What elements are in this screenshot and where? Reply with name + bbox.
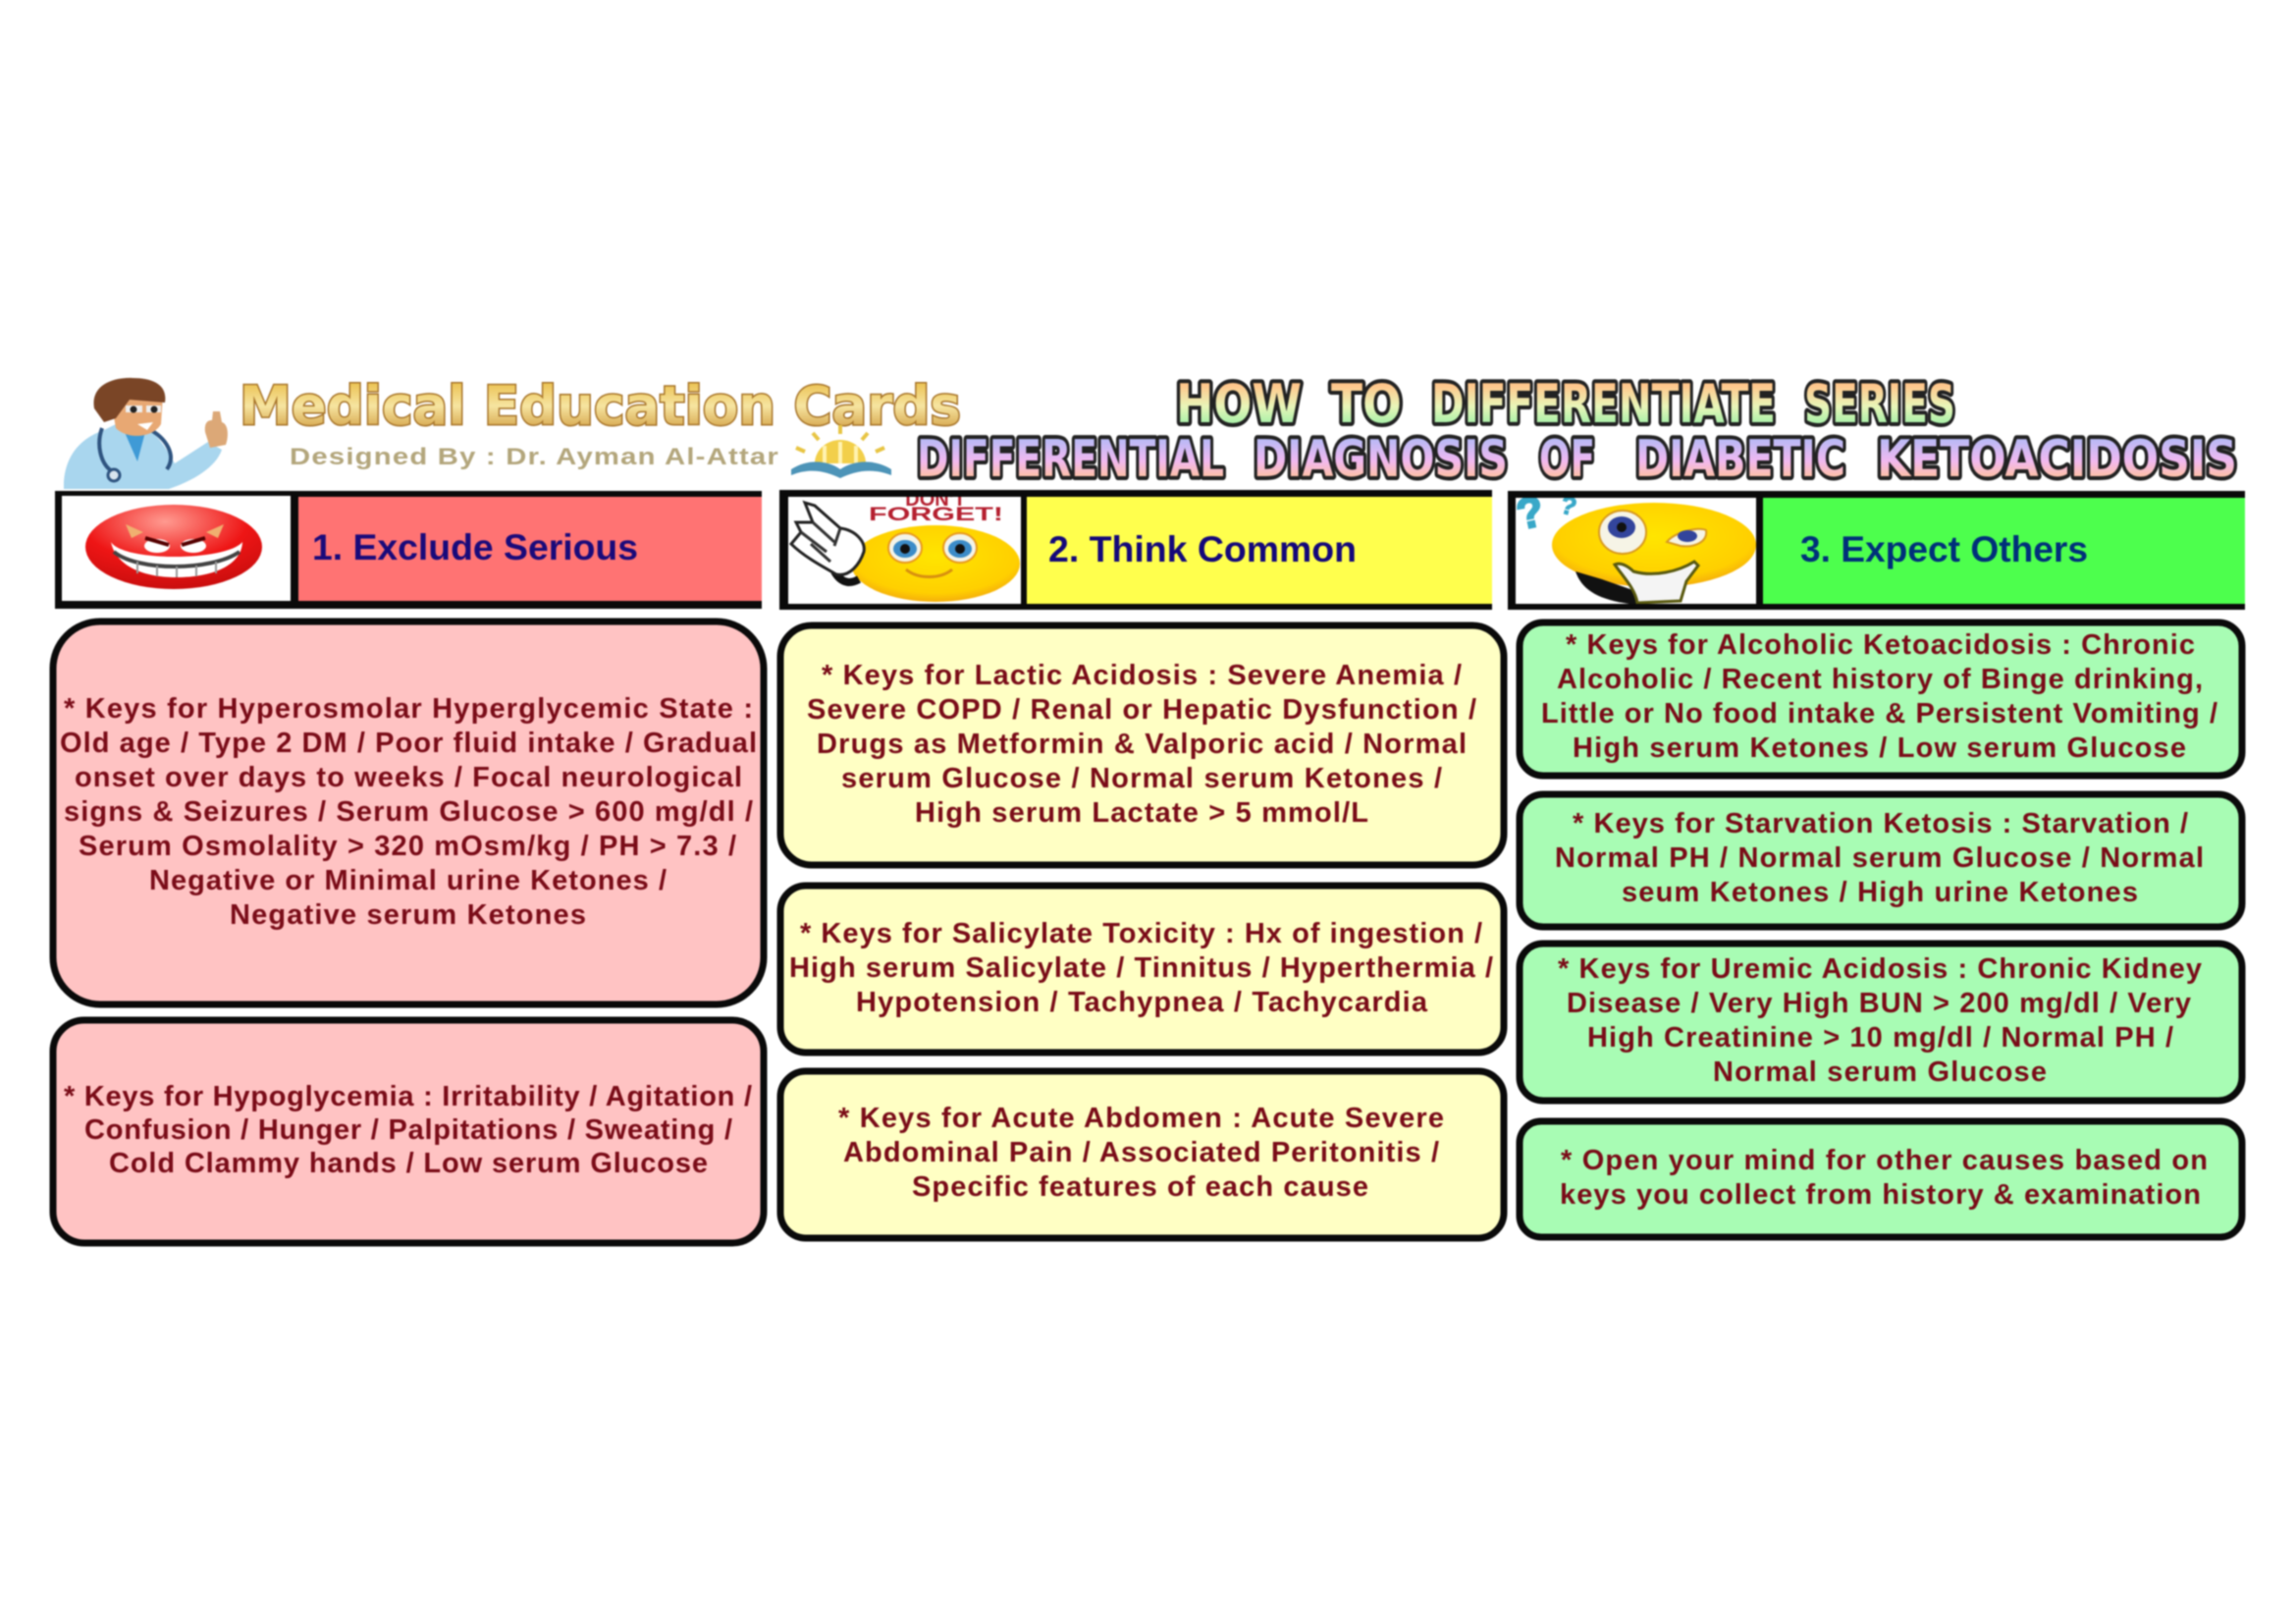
heading: infographic title: DIAGNOSIS bbox=[1254, 430, 1508, 489]
card: Uremic Acidosis: High Creatinine > 10 mg/dl / Normal PH / bbox=[1587, 1022, 2173, 1054]
heading: infographic title: KETOACIDOSIS bbox=[1877, 430, 2237, 489]
panel: header 3 Expect Others bbox=[1508, 487, 2245, 610]
panel: header 2 Think Common bbox=[779, 489, 1492, 610]
card: Hyperosmolar Hyperglycemic State: onset over days to weeks / Focal neurological bbox=[75, 762, 742, 793]
heading: infographic title: DIABETIC bbox=[1635, 430, 1845, 489]
card: Alcoholic Ketoacidosis: High serum Ketones / Low serum Glucose bbox=[1573, 732, 2186, 764]
card: Open your mind: * Open your mind for other causes based on bbox=[1561, 1145, 2208, 1176]
card: Lactic Acidosis: Drugs as Metformin & Valporic acid / Normal bbox=[817, 729, 1467, 760]
card: Hypoglycemia bbox=[53, 1020, 764, 1243]
panel: header 1 Exclude Serious bbox=[55, 491, 762, 609]
heading: infographic title bbox=[917, 430, 2237, 489]
card: Hyperosmolar Hyperglycemic State: Old age / Type 2 DM / Poor fluid intake / Gradual bbox=[60, 728, 757, 759]
card: Alcoholic Ketoacidosis: * Keys for Alcoholic Ketoacidosis : Chronic bbox=[1566, 629, 2195, 661]
card: Open your mind: keys you collect from history & examination bbox=[1560, 1179, 2201, 1211]
card: Uremic Acidosis: Normal serum Glucose bbox=[1713, 1056, 2047, 1088]
card: Lactic Acidosis: * Keys for Lactic Acidosis : Severe Anemia / bbox=[822, 660, 1462, 691]
card: Starvation Ketosis: seum Ketones / High urine Ketones bbox=[1622, 877, 2138, 908]
card: Salicylate Toxicity: Hypotension / Tachypnea / Tachycardia bbox=[856, 987, 1428, 1018]
heading: series name bbox=[1176, 373, 1955, 435]
card: Hyperosmolar Hyperglycemic State: signs & Seizures / Serum Glucose > 600 mg/dl / bbox=[64, 796, 753, 828]
icon: smiley with pointing hand and don't forget note: DON'T bbox=[905, 489, 966, 511]
card: Uremic Acidosis bbox=[1520, 944, 2242, 1101]
card: Alcoholic Ketoacidosis bbox=[1520, 622, 2242, 776]
card: Lactic Acidosis bbox=[780, 625, 1504, 865]
card: Alcoholic Ketoacidosis: Little or No food intake & Persistent Vomiting / bbox=[1541, 698, 2217, 730]
card: Acute Abdomen: Abdominal Pain / Associated Peritonitis / bbox=[843, 1137, 1439, 1168]
card: Salicylate Toxicity: High serum Salicylate / Tinnitus / Hyperthermia / bbox=[789, 952, 1493, 984]
icon: open book with rising sun bbox=[791, 425, 891, 478]
card: Hyperosmolar Hyperglycemic State: Negative serum Ketones bbox=[230, 899, 586, 931]
icon: thinking smiley with question marks: ? bbox=[1513, 487, 1548, 539]
heading: infographic title: OF bbox=[1539, 430, 1595, 489]
card: Salicylate Toxicity bbox=[780, 886, 1504, 1053]
text: designer credit: Designed By : Dr. Ayman Al-Attar bbox=[290, 444, 779, 470]
title: Medical Education Cards: Medical Education Cards bbox=[240, 375, 961, 437]
icon: smiley with pointing hand and don't forget note: FORGET! bbox=[869, 505, 1003, 525]
card: Salicylate Toxicity: * Keys for Salicylate Toxicity : Hx of ingestion / bbox=[800, 918, 1482, 949]
heading: series name: DIFFERENTIATE bbox=[1431, 373, 1776, 435]
card: Starvation Ketosis bbox=[1520, 794, 2242, 927]
card: Hyperosmolar Hyperglycemic State: Negative or Minimal urine Ketones / bbox=[149, 865, 667, 896]
card: Lactic Acidosis: serum Glucose / Normal serum Ketones / bbox=[841, 763, 1442, 794]
card: Hypoglycemia: * Keys for Hypoglycemia : Irritability / Agitation / bbox=[64, 1081, 752, 1112]
card: Uremic Acidosis: * Keys for Uremic Acidosis : Chronic Kidney bbox=[1558, 953, 2202, 985]
card: Hypoglycemia: Cold Clammy hands / Low serum Glucose bbox=[109, 1148, 708, 1179]
icon: thinking smiley with question marks: ? bbox=[1557, 489, 1580, 522]
card: Hyperosmolar Hyperglycemic State: * Keys for Hyperosmolar Hyperglycemic State : bbox=[64, 693, 753, 725]
label: 1. Exclude Serious: 1. Exclude Serious bbox=[312, 527, 638, 568]
card: Alcoholic Ketoacidosis: Alcoholic / Recent history of Binge drinking, bbox=[1557, 664, 2203, 695]
card: Open your mind bbox=[1520, 1121, 2242, 1237]
icon: grinning red devil face bbox=[85, 505, 262, 589]
icon: doctor with stethoscope giving thumbs up bbox=[64, 378, 228, 489]
card: Lactic Acidosis: High serum Lactate > 5 mmol/L bbox=[915, 797, 1368, 829]
label: 3. Expect Others: 3. Expect Others bbox=[1800, 529, 2088, 569]
heading: infographic title: DIFFERENTIAL bbox=[917, 430, 1224, 489]
card: Lactic Acidosis: Severe COPD / Renal or Hepatic Dysfunction / bbox=[807, 694, 1476, 726]
icon: smiley with pointing hand and don't forget note bbox=[791, 489, 1020, 602]
card: Acute Abdomen: * Keys for Acute Abdomen : Acute Severe bbox=[838, 1103, 1444, 1134]
card: Hyperosmolar Hyperglycemic State: Serum Osmolality > 320 mOsm/kg / PH > 7.3 / bbox=[79, 831, 736, 862]
card: Uremic Acidosis: Disease / Very High BUN > 200 mg/dl / Very bbox=[1567, 988, 2191, 1019]
heading: series name: TO bbox=[1331, 373, 1402, 435]
heading: series name: HOW bbox=[1176, 373, 1302, 435]
card: Starvation Ketosis: Normal PH / Normal serum Glucose / Normal bbox=[1555, 842, 2204, 874]
card: Hypoglycemia: Confusion / Hunger / Palpitations / Sweating / bbox=[84, 1114, 732, 1146]
card: Acute Abdomen bbox=[780, 1071, 1504, 1238]
label: 2. Think Common: 2. Think Common bbox=[1048, 529, 1357, 569]
icon: thinking smiley with question marks bbox=[1513, 487, 1756, 605]
card: Hyperosmolar Hyperglycemic State bbox=[53, 622, 764, 1004]
heading: series name: SERIES bbox=[1804, 373, 1955, 435]
card: Acute Abdomen: Specific features of each cause bbox=[912, 1171, 1368, 1203]
card: Starvation Ketosis: * Keys for Starvation Ketosis : Starvation / bbox=[1573, 808, 2188, 839]
